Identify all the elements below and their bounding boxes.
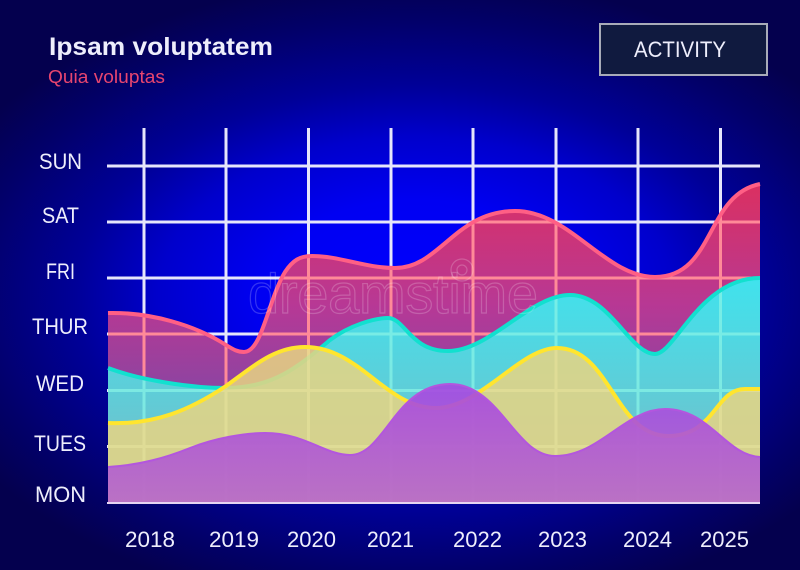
y-axis labels: MON xyxy=(35,482,86,507)
x-axis labels: 2023 xyxy=(538,527,587,552)
area series: purple xyxy=(108,384,760,503)
x-axis labels xyxy=(125,527,749,552)
y-axis labels: FRI xyxy=(46,259,75,284)
x-axis labels: 2019 xyxy=(209,527,259,552)
y-axis labels: WED xyxy=(36,371,84,396)
baseline xyxy=(107,502,760,504)
x-axis labels: 2018 xyxy=(125,527,175,552)
area series: teal xyxy=(107,276,760,466)
activity badge: ACTIVITY xyxy=(634,37,726,62)
y-axis labels: TUES xyxy=(34,431,86,456)
x-axis labels: 2020 xyxy=(287,527,336,552)
watermark: dreamstime xyxy=(248,262,538,325)
area series: pink xyxy=(108,182,760,386)
area series: yellow xyxy=(108,345,760,502)
subtitle: Quia voluptas xyxy=(48,67,165,87)
activity badge xyxy=(600,24,767,75)
x-axis labels: 2022 xyxy=(453,527,502,552)
y-axis labels: SUN xyxy=(39,149,82,174)
grid lines xyxy=(107,128,760,503)
x-axis labels: 2021 xyxy=(367,527,414,552)
x-axis labels: 2024 xyxy=(623,527,672,552)
y-axis labels xyxy=(32,149,88,507)
y-axis labels: THUR xyxy=(32,314,88,339)
y-axis labels: SAT xyxy=(42,203,79,228)
x-axis labels: 2025 xyxy=(700,527,749,552)
title: Ipsam voluptatem xyxy=(49,33,273,61)
